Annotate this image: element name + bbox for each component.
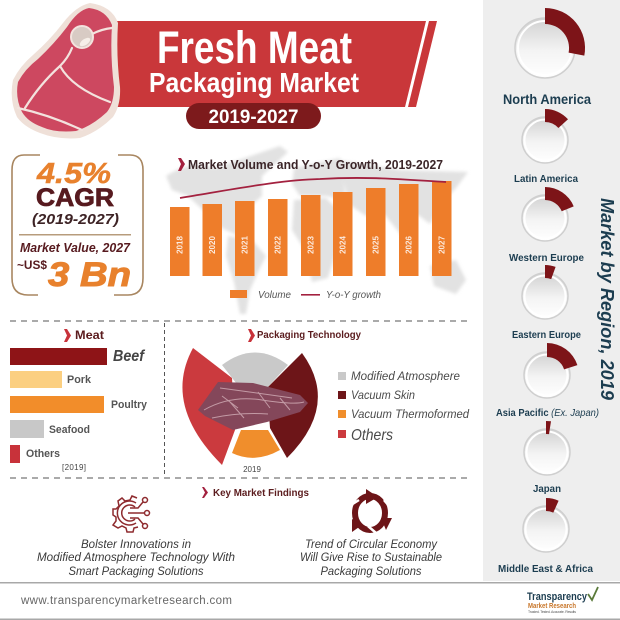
- bar: poultry: Poultry: [111, 399, 148, 411]
- title line 2: Packaging Market: [149, 67, 359, 98]
- title ribbon: [112, 21, 437, 107]
- bar: pork: [10, 371, 92, 388]
- bar year labels: 2027: [438, 236, 446, 254]
- chart legend: Volume: [258, 290, 291, 301]
- bar year labels: 2018: [176, 236, 184, 254]
- meat heading: Meat: [75, 328, 104, 342]
- logo: Trusted. Tested. Accurate. Results: [528, 610, 576, 614]
- finding: circular economy: Will Give Rise to Sustainable: [300, 552, 442, 564]
- year pill: 2019-2027: [208, 107, 298, 128]
- bar: others: Others: [26, 448, 60, 460]
- meat chart year: [2019]: [62, 463, 86, 472]
- market value label: Market Value, 2027: [20, 241, 131, 255]
- meat photo: [198, 382, 308, 430]
- pie legend: Modified Atmosphere: [351, 371, 460, 383]
- panel: CAGR callout: [12, 155, 143, 295]
- finding: modified atmosphere: Bolster Innovations in: [81, 539, 191, 551]
- dial: Middle East and Africa: [523, 498, 569, 552]
- bar: beef: Beef: [113, 348, 145, 365]
- growth line: [180, 178, 446, 198]
- bar year labels: 2026: [404, 236, 414, 254]
- chart heading: Market Volume and Y-o-Y Growth, 2019-2027: [188, 157, 443, 172]
- panel: meat bar chart: [10, 328, 148, 472]
- dial: Latin America: [522, 109, 568, 163]
- bar year labels: 2023: [306, 236, 316, 254]
- label: Asia Pacific: Asia Pacific (Ex. Japan): [496, 407, 599, 419]
- panel: market by region: [483, 0, 620, 581]
- bar: beef: [10, 348, 145, 365]
- bar: seafood: [10, 420, 90, 438]
- market value: 3 Bn: [48, 256, 131, 294]
- packaging heading: Packaging Technology: [257, 329, 361, 341]
- CAGR value: 4.5%: [36, 158, 111, 190]
- bar: others: [10, 445, 60, 463]
- label: Japan: Japan: [533, 483, 561, 495]
- dial: North America: [515, 8, 585, 78]
- finding: modified atmosphere: Smart Packaging Solutions: [68, 566, 204, 578]
- bar: seafood: Seafood: [49, 424, 90, 436]
- chart legend: [230, 290, 381, 301]
- pie legend: Vacuum Skin: [351, 390, 415, 402]
- bars: [170, 181, 452, 276]
- finding: modified atmosphere: Modified Atmosphere Technology With: [37, 552, 235, 564]
- bar year labels: [176, 236, 446, 254]
- dial: Eastern Europe: [522, 265, 568, 319]
- pie legend: Others: [351, 427, 393, 444]
- key findings heading: Key Market Findings: [213, 487, 309, 499]
- vertical heading: market by region: Market by Region, 2019: [597, 198, 617, 400]
- icon: circular economy arrows: [351, 489, 392, 533]
- currency: ~US$: [17, 260, 48, 272]
- world map backdrop: [166, 146, 468, 314]
- label: Middle East and Africa: Middle East & Africa: [498, 563, 593, 575]
- title line 1: Fresh Meat: [157, 22, 352, 73]
- dial: Japan: [524, 421, 570, 475]
- bar year labels: 2025: [372, 236, 380, 254]
- chart legend: Y-o-Y growth: [326, 290, 381, 301]
- year pill: [186, 103, 321, 129]
- bar year labels: 2021: [240, 236, 250, 254]
- finding: circular economy: Packaging Solutions: [320, 566, 422, 578]
- pie legend: Vacuum Thermoformed: [351, 409, 470, 421]
- logo: [527, 587, 598, 614]
- dial: Western Europe: [522, 187, 574, 241]
- CAGR label: CAGR: [36, 184, 114, 212]
- panel: packaging technology: [182, 329, 470, 474]
- label: North America: North America: [503, 91, 591, 107]
- finding: circular economy: Trend of Circular Economy: [305, 539, 438, 551]
- meat heading: [64, 328, 104, 342]
- CAGR period: (2019-2027): [32, 212, 119, 228]
- pie chart: [182, 348, 318, 474]
- footer url: www.transparencymarketresearch.com: [20, 595, 232, 607]
- dial: Asia Pacific: [524, 343, 577, 398]
- label: Western Europe: Western Europe: [509, 252, 584, 264]
- logo: Transparency: [527, 591, 588, 603]
- pie legend: [338, 371, 470, 444]
- bar year labels: 2020: [208, 236, 217, 254]
- finding: circular economy: [300, 539, 442, 578]
- icon: steak: [12, 3, 120, 138]
- icon: technology gear: [113, 496, 150, 532]
- label: Latin America: Latin America: [514, 173, 578, 185]
- chart: market volume and growth: [166, 146, 468, 314]
- pie year: 2019: [243, 465, 261, 474]
- label: Eastern Europe: Eastern Europe: [512, 329, 581, 341]
- bar: poultry: [10, 396, 148, 413]
- bar year labels: 2024: [338, 236, 348, 254]
- bar year labels: 2022: [274, 236, 282, 254]
- logo: Market Research: [528, 601, 576, 610]
- finding: modified atmosphere: [37, 539, 235, 578]
- bar: pork: Pork: [67, 374, 92, 386]
